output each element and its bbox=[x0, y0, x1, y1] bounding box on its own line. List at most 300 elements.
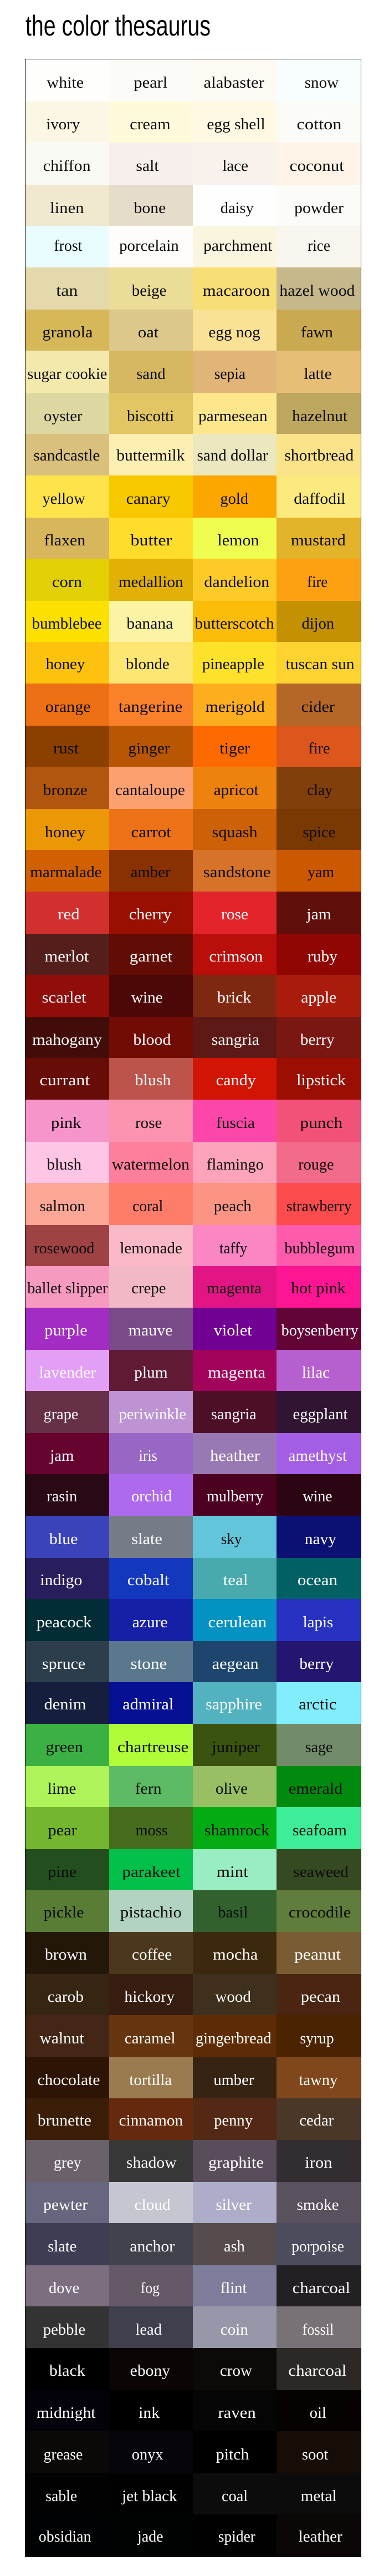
swatch: mustard: mustard bbox=[291, 532, 346, 549]
swatch: rasin bbox=[25, 1474, 109, 1516]
swatch: pistachio bbox=[109, 1890, 193, 1932]
swatch: boysenberry: boysenberry bbox=[281, 1322, 359, 1339]
swatch: aegean bbox=[193, 1641, 277, 1682]
swatch: crimson: crimson bbox=[209, 948, 263, 965]
swatch: oil bbox=[277, 2390, 361, 2431]
swatch: crocodile bbox=[277, 1890, 361, 1932]
swatch: tan: tan bbox=[56, 282, 78, 300]
swatch: onyx bbox=[109, 2431, 193, 2473]
swatch: flint: flint bbox=[221, 2279, 247, 2297]
swatch: green: green bbox=[46, 1738, 83, 1756]
swatch: metal: metal bbox=[301, 2487, 337, 2505]
swatch: oat: oat bbox=[138, 323, 158, 341]
swatch: mustard bbox=[277, 518, 361, 559]
swatch: hazel wood bbox=[277, 267, 361, 310]
swatch: salmon: salmon bbox=[40, 1197, 85, 1215]
swatch: carrot: carrot bbox=[131, 823, 171, 841]
swatch: aegean: aegean bbox=[212, 1655, 259, 1673]
swatch: yam: yam bbox=[308, 863, 335, 881]
swatch: lilac: lilac bbox=[302, 1364, 330, 1381]
swatch: olive bbox=[193, 1766, 277, 1807]
swatch: garnet: garnet bbox=[130, 948, 172, 965]
swatch: parmesean: parmesean bbox=[198, 407, 268, 425]
swatch: raven bbox=[193, 2390, 277, 2431]
swatch: sepia: sepia bbox=[214, 365, 245, 383]
swatch: navy bbox=[277, 1516, 361, 1558]
swatch: pebble: pebble bbox=[43, 2321, 85, 2339]
swatch: red bbox=[25, 892, 109, 934]
swatch: sand dollar bbox=[193, 434, 277, 475]
swatch: white bbox=[25, 59, 109, 102]
swatch: cotton bbox=[277, 102, 361, 143]
swatch: porcelain bbox=[109, 226, 193, 267]
swatch: stone bbox=[109, 1641, 193, 1682]
swatch: slate bbox=[25, 2223, 109, 2265]
swatch: pink bbox=[25, 1100, 109, 1142]
swatch: seafoam bbox=[277, 1807, 361, 1849]
swatch: jam: jam bbox=[49, 1447, 74, 1465]
swatch: rosewood bbox=[25, 1225, 109, 1266]
swatch: mint bbox=[193, 1849, 277, 1890]
swatch: boysenberry bbox=[277, 1308, 361, 1350]
swatch: brunette bbox=[25, 2098, 109, 2140]
swatch: indigo bbox=[25, 1558, 109, 1599]
swatch: charcoal: charcoal bbox=[288, 2362, 346, 2380]
swatch: ginger: ginger bbox=[128, 740, 170, 757]
swatch: honey bbox=[25, 809, 109, 850]
swatch: cantaloupe: cantaloupe bbox=[115, 781, 185, 799]
swatch: daisy: daisy bbox=[221, 199, 254, 217]
swatch: azure bbox=[109, 1599, 193, 1641]
swatch: cinnamon: cinnamon bbox=[119, 2112, 183, 2129]
swatch: bumblebee bbox=[25, 601, 109, 642]
swatch: emerald bbox=[277, 1766, 361, 1807]
swatch: tan bbox=[25, 267, 109, 310]
swatch: cedar: cedar bbox=[299, 2112, 334, 2129]
swatch: parchment: parchment bbox=[203, 237, 272, 255]
swatch: lavender bbox=[25, 1350, 109, 1391]
swatch: alabaster bbox=[193, 59, 277, 102]
swatch: blue: blue bbox=[49, 1530, 78, 1548]
swatch: coffee: coffee bbox=[132, 1946, 172, 1963]
swatch: sapphire: sapphire bbox=[206, 1696, 262, 1713]
swatch: crimson bbox=[193, 934, 277, 975]
swatch: tortilla: tortilla bbox=[129, 2071, 172, 2089]
swatch: carrot bbox=[109, 809, 193, 850]
swatch: rust: rust bbox=[53, 740, 79, 757]
swatch: lipstick bbox=[277, 1058, 361, 1100]
swatch: oil: oil bbox=[310, 2404, 326, 2422]
swatch: grey: grey bbox=[54, 2154, 81, 2172]
swatch: syrup: syrup bbox=[300, 2030, 334, 2047]
swatch: charcoal: charcoal bbox=[293, 2279, 350, 2297]
swatch: powder: powder bbox=[294, 199, 344, 217]
swatch: caramel bbox=[109, 2015, 193, 2057]
swatch: juniper: juniper bbox=[211, 1738, 260, 1756]
swatch: teal bbox=[193, 1558, 277, 1599]
swatch: carob: carob bbox=[48, 1988, 84, 2006]
swatch: spider bbox=[193, 2514, 277, 2557]
swatch: sugar cookie bbox=[25, 351, 109, 393]
swatch: blush bbox=[25, 1142, 109, 1183]
swatch: amethyst bbox=[277, 1433, 361, 1474]
swatch: grey bbox=[25, 2140, 109, 2182]
swatch: periwinkle: periwinkle bbox=[119, 1405, 186, 1423]
swatch: spruce bbox=[25, 1641, 109, 1682]
swatch: gingerbread: gingerbread bbox=[196, 2030, 272, 2047]
swatch: grease bbox=[25, 2431, 109, 2473]
swatch: sapphire bbox=[193, 1682, 277, 1724]
swatch: spice: spice bbox=[303, 823, 335, 841]
swatch: carob bbox=[25, 1974, 109, 2015]
swatch: leather bbox=[277, 2514, 361, 2557]
swatch: merigold bbox=[193, 684, 277, 726]
swatch: chocolate bbox=[25, 2057, 109, 2098]
swatch: sand bbox=[109, 351, 193, 393]
swatch: smoke: smoke bbox=[297, 2196, 339, 2214]
swatch: snow bbox=[277, 59, 361, 102]
swatch: rosewood: rosewood bbox=[34, 1239, 95, 1257]
swatch: rasin: rasin bbox=[47, 1487, 78, 1505]
swatch: ebony bbox=[109, 2348, 193, 2390]
swatch: obsidian: obsidian bbox=[39, 2528, 91, 2545]
swatch: rice bbox=[277, 226, 361, 267]
swatch: egg nog: egg nog bbox=[208, 323, 260, 341]
swatch: chiffon: chiffon bbox=[43, 157, 91, 175]
swatch: fire bbox=[277, 726, 361, 767]
swatch: scarlet bbox=[25, 975, 109, 1017]
swatch: cantaloupe bbox=[109, 767, 193, 809]
swatch: orange bbox=[25, 684, 109, 726]
swatch: merlot bbox=[25, 934, 109, 975]
swatch: parakeet: parakeet bbox=[122, 1863, 181, 1881]
swatch: currant: currant bbox=[40, 1071, 90, 1089]
swatch: denim bbox=[25, 1682, 109, 1724]
swatch: punch: punch bbox=[300, 1114, 343, 1132]
swatch: orange: orange bbox=[45, 698, 91, 716]
swatch: linen bbox=[25, 185, 109, 226]
swatch: fire: fire bbox=[307, 573, 327, 591]
swatch: iron bbox=[277, 2140, 361, 2182]
swatch: coconut: coconut bbox=[290, 157, 344, 175]
swatch: sable: sable bbox=[45, 2487, 77, 2505]
swatch: berry bbox=[277, 1017, 361, 1058]
swatch: rust bbox=[25, 726, 109, 767]
swatch: metal bbox=[277, 2473, 361, 2514]
swatch: tuscan sun: tuscan sun bbox=[286, 655, 355, 673]
swatch: pearl bbox=[109, 59, 193, 102]
swatch: purple bbox=[25, 1308, 109, 1350]
swatch: rose: rose bbox=[221, 905, 248, 923]
swatch: sky: sky bbox=[221, 1530, 242, 1548]
swatch: sage: sage bbox=[305, 1738, 332, 1756]
swatch: hot pink: hot pink bbox=[291, 1279, 346, 1297]
swatch: walnut: walnut bbox=[40, 2030, 84, 2047]
swatch: jam bbox=[277, 892, 361, 934]
swatch: porcelain: porcelain bbox=[119, 237, 179, 255]
swatch: honey bbox=[25, 642, 109, 684]
swatch: pecan: pecan bbox=[301, 1988, 341, 2006]
swatch: stone: stone bbox=[131, 1655, 167, 1673]
swatch: pear: pear bbox=[48, 1821, 77, 1839]
swatch: powder bbox=[277, 185, 361, 226]
swatch: grape: grape bbox=[44, 1405, 78, 1423]
swatch: caramel: caramel bbox=[125, 2030, 176, 2047]
swatch: coffee bbox=[109, 1932, 193, 1974]
swatch: butter bbox=[109, 518, 193, 559]
swatch: pine: pine bbox=[48, 1863, 76, 1881]
swatch: dijon bbox=[277, 601, 361, 642]
swatch: blush: blush bbox=[135, 1071, 171, 1089]
swatch: lipstick: lipstick bbox=[296, 1071, 346, 1089]
swatch: amethyst: amethyst bbox=[288, 1447, 347, 1465]
swatch: strawberry bbox=[277, 1183, 361, 1225]
swatch: dijon: dijon bbox=[301, 615, 335, 632]
swatch: chartreuse bbox=[109, 1724, 193, 1766]
swatch: cream: cream bbox=[130, 115, 171, 133]
swatch: onyx: onyx bbox=[132, 2446, 163, 2463]
swatch: bone: bone bbox=[134, 199, 166, 217]
swatch: mahogany bbox=[25, 1017, 109, 1058]
swatch: shamrock bbox=[193, 1807, 277, 1849]
swatch: cider bbox=[277, 684, 361, 726]
swatch: fire bbox=[277, 559, 361, 601]
swatch: leather: leather bbox=[299, 2528, 342, 2545]
swatch: lead: lead bbox=[135, 2321, 162, 2339]
swatch: magenta bbox=[193, 1266, 277, 1308]
swatch: fern bbox=[109, 1766, 193, 1807]
swatch: frost bbox=[25, 226, 109, 267]
swatch: crepe bbox=[109, 1266, 193, 1308]
swatch: peanut bbox=[277, 1932, 361, 1974]
swatch: blush bbox=[109, 1058, 193, 1100]
swatch: orchid: orchid bbox=[131, 1487, 172, 1505]
swatch: rouge bbox=[277, 1142, 361, 1183]
swatch: banana bbox=[109, 601, 193, 642]
swatch: wine: wine bbox=[131, 989, 163, 1006]
swatch: punch bbox=[277, 1100, 361, 1142]
swatch: charcoal bbox=[277, 2348, 361, 2390]
swatch: raven: raven bbox=[218, 2404, 256, 2422]
swatch: moss bbox=[109, 1807, 193, 1849]
swatch: amber bbox=[109, 850, 193, 892]
swatch: taffy bbox=[193, 1225, 277, 1266]
swatch: grease: grease bbox=[44, 2446, 83, 2463]
swatch: strawberry: strawberry bbox=[286, 1197, 352, 1215]
swatch: honey: honey bbox=[45, 823, 86, 841]
swatch: blood bbox=[109, 1017, 193, 1058]
swatch: ivory bbox=[25, 102, 109, 143]
swatch: squash: squash bbox=[212, 823, 258, 841]
swatch: white: white bbox=[47, 74, 84, 92]
swatch: silver bbox=[193, 2182, 277, 2223]
swatch: lapis: lapis bbox=[303, 1613, 333, 1631]
swatch: rose: rose bbox=[135, 1114, 162, 1132]
swatch: pitch: pitch bbox=[216, 2446, 249, 2463]
swatch: penny: penny bbox=[214, 2112, 253, 2129]
swatch: banana: banana bbox=[126, 615, 173, 632]
swatch: spider: spider bbox=[218, 2528, 255, 2545]
swatch: midnight bbox=[25, 2390, 109, 2431]
swatch: mulberry: mulberry bbox=[207, 1487, 264, 1505]
swatch: fern: fern bbox=[135, 1780, 162, 1798]
swatch: fawn: fawn bbox=[301, 323, 333, 341]
swatch: admiral: admiral bbox=[122, 1696, 173, 1713]
swatch: iris bbox=[109, 1433, 193, 1474]
swatch: cotton: cotton bbox=[297, 115, 342, 133]
swatch: iron: iron bbox=[305, 2154, 332, 2172]
swatch: parchment bbox=[193, 226, 277, 267]
swatch: umber bbox=[193, 2057, 277, 2098]
swatch: jet black bbox=[109, 2473, 193, 2514]
swatch: salmon bbox=[25, 1183, 109, 1225]
swatch: daffodil: daffodil bbox=[294, 490, 346, 508]
swatch: lead bbox=[109, 2306, 193, 2348]
swatch: azure: azure bbox=[132, 1613, 168, 1631]
swatch: coal bbox=[193, 2473, 277, 2514]
swatch: amber: amber bbox=[131, 863, 171, 881]
swatch: heather: heather bbox=[210, 1447, 260, 1465]
swatch: shadow: shadow bbox=[126, 2154, 177, 2172]
swatch: navy: navy bbox=[305, 1530, 337, 1548]
swatch: bronze: bronze bbox=[43, 781, 88, 799]
swatch: heather bbox=[193, 1433, 277, 1474]
swatch: cinnamon bbox=[109, 2098, 193, 2140]
swatch: ocean bbox=[277, 1558, 361, 1599]
swatch: blue bbox=[25, 1516, 109, 1558]
swatch: dandelion: dandelion bbox=[204, 573, 270, 591]
swatch: magenta bbox=[193, 1350, 277, 1391]
swatch: sage bbox=[277, 1724, 361, 1766]
swatch: wood: wood bbox=[215, 1988, 251, 2006]
swatch: ocean: ocean bbox=[298, 1571, 337, 1589]
swatch: pickle: pickle bbox=[44, 1904, 84, 1921]
swatch: fuscia bbox=[193, 1100, 277, 1142]
swatch: arctic: arctic bbox=[299, 1696, 337, 1713]
swatch: fuscia: fuscia bbox=[216, 1114, 255, 1132]
swatch: spruce: spruce bbox=[42, 1655, 85, 1673]
swatch: beige bbox=[109, 267, 193, 310]
swatch: purple: purple bbox=[44, 1322, 88, 1339]
swatch: crocodile: crocodile bbox=[289, 1904, 351, 1921]
swatch: emerald: emerald bbox=[289, 1780, 343, 1798]
swatch: iris: iris bbox=[139, 1447, 157, 1465]
swatch: jade bbox=[109, 2514, 193, 2557]
swatch: lime: lime bbox=[48, 1780, 76, 1798]
swatch: pewter bbox=[25, 2182, 109, 2223]
swatch: midnight: midnight bbox=[37, 2404, 95, 2422]
swatch: lace: lace bbox=[222, 157, 248, 175]
swatch: tuscan sun bbox=[277, 642, 361, 684]
swatch: pearl: pearl bbox=[134, 74, 167, 92]
swatch: anchor bbox=[109, 2223, 193, 2265]
swatch: dandelion bbox=[193, 559, 277, 601]
swatch: indigo: indigo bbox=[40, 1571, 82, 1589]
swatch: dove bbox=[25, 2265, 109, 2306]
swatch: eggplant bbox=[277, 1391, 361, 1433]
swatch: sangria: sangria bbox=[212, 1031, 259, 1049]
swatch: wine: wine bbox=[303, 1487, 332, 1505]
swatch: sky bbox=[193, 1516, 277, 1558]
swatch: jam bbox=[25, 1433, 109, 1474]
swatch: medallion bbox=[109, 559, 193, 601]
swatch: blonde: blonde bbox=[126, 655, 170, 673]
swatch: butter: butter bbox=[131, 532, 172, 549]
swatch: bumblebee: bumblebee bbox=[32, 615, 102, 632]
swatch: mocha bbox=[193, 1932, 277, 1974]
swatch: taffy: taffy bbox=[219, 1239, 248, 1257]
swatch: cherry: cherry bbox=[129, 905, 172, 923]
swatch: sugar cookie: sugar cookie bbox=[27, 365, 107, 383]
swatch: berry bbox=[277, 1641, 361, 1682]
swatch: frost: frost bbox=[54, 237, 82, 255]
swatch: fog: fog bbox=[141, 2279, 160, 2297]
swatch: ballet slipper bbox=[25, 1266, 109, 1308]
swatch: bubblegum bbox=[277, 1225, 361, 1266]
swatch: peacock: peacock bbox=[37, 1613, 92, 1631]
swatch: penny bbox=[193, 2098, 277, 2140]
swatch: lemonade: lemonade bbox=[120, 1239, 182, 1257]
swatch: medallion: medallion bbox=[119, 573, 183, 591]
swatch: sand dollar: sand dollar bbox=[197, 447, 268, 464]
swatch: yellow bbox=[25, 475, 109, 518]
swatch: chocolate: chocolate bbox=[38, 2071, 100, 2089]
swatch: sandcastle: sandcastle bbox=[33, 447, 100, 464]
swatch: apple bbox=[277, 975, 361, 1017]
swatch: egg nog bbox=[193, 310, 277, 351]
swatch: candy: candy bbox=[216, 1071, 256, 1089]
swatch: seafoam: seafoam bbox=[293, 1821, 347, 1839]
swatch: pine bbox=[25, 1849, 109, 1890]
swatch: black bbox=[25, 2348, 109, 2390]
swatch: pineapple bbox=[193, 642, 277, 684]
swatch: apricot bbox=[193, 767, 277, 809]
swatch: hickory bbox=[109, 1974, 193, 2015]
swatch: gold: gold bbox=[220, 490, 249, 508]
swatch: canary bbox=[109, 475, 193, 518]
swatch: oat bbox=[109, 310, 193, 351]
swatch: daisy bbox=[193, 185, 277, 226]
swatch: latte bbox=[277, 351, 361, 393]
swatch: crepe: crepe bbox=[131, 1279, 166, 1297]
swatch: linen: linen bbox=[50, 199, 84, 217]
swatch: currant bbox=[25, 1058, 109, 1100]
swatch: graphite: graphite bbox=[208, 2154, 264, 2172]
swatch: wine bbox=[277, 1474, 361, 1516]
swatch: bone bbox=[109, 185, 193, 226]
swatch: lime bbox=[25, 1766, 109, 1807]
swatch: buttermilk: buttermilk bbox=[116, 447, 185, 464]
swatch: admiral bbox=[109, 1682, 193, 1724]
swatch: tawny bbox=[277, 2057, 361, 2098]
swatch: tiger: tiger bbox=[219, 740, 250, 757]
swatch: sepia bbox=[193, 351, 277, 393]
swatch: sangria bbox=[193, 1017, 277, 1058]
swatch: cream bbox=[109, 102, 193, 143]
swatch: arctic bbox=[277, 1682, 361, 1724]
swatch: orchid bbox=[109, 1474, 193, 1516]
swatch: ginger bbox=[109, 726, 193, 767]
swatch: rice: rice bbox=[308, 237, 330, 255]
swatch: ink: ink bbox=[139, 2404, 160, 2422]
swatch: chiffon bbox=[25, 143, 109, 185]
swatch: sangria: sangria bbox=[211, 1405, 257, 1423]
swatch: bronze bbox=[25, 767, 109, 809]
swatch: violet: violet bbox=[214, 1322, 252, 1339]
swatch: merigold: merigold bbox=[206, 698, 265, 716]
swatch: flaxen: flaxen bbox=[44, 532, 86, 549]
swatch: pink: pink bbox=[51, 1114, 81, 1132]
